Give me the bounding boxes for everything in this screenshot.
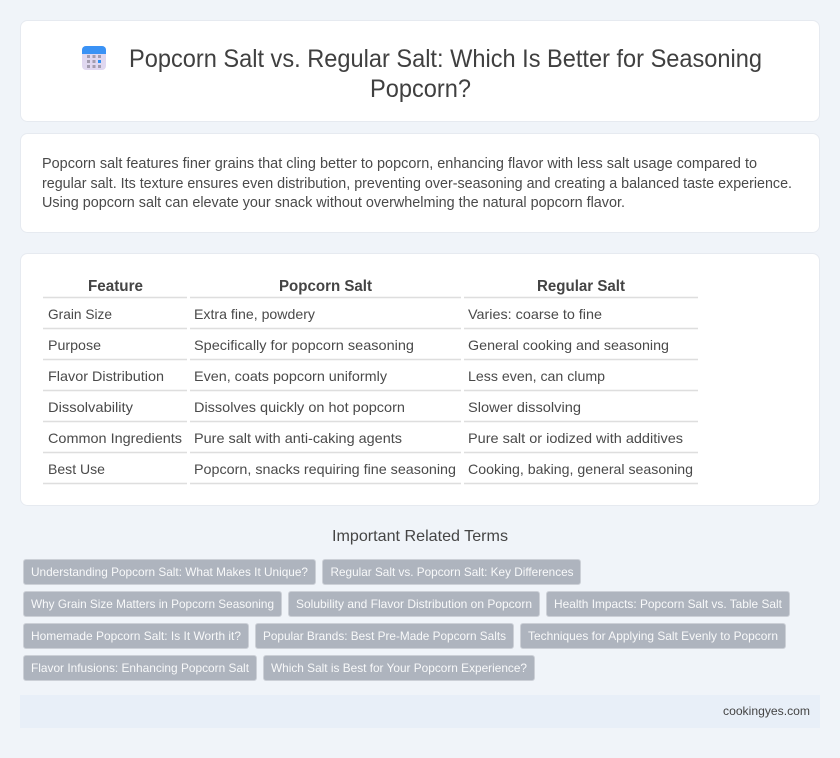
icon: calendar (82, 46, 106, 70)
table row: flavor distribution: Less even, can clump (468, 368, 605, 384)
table row: best use: Cooking, baking, general seasoning (468, 461, 693, 477)
tag: Understanding Popcorn Salt: What Makes It Unique? (31, 565, 308, 579)
tag: Regular Salt vs. Popcorn Salt: Key Differences (330, 565, 574, 579)
table header: Popcorn Salt (279, 278, 373, 295)
tag (264, 656, 534, 680)
tag (24, 624, 248, 648)
table header (88, 278, 626, 295)
footer (20, 695, 820, 728)
text block: introduction (42, 156, 792, 211)
panel: introduction (20, 134, 820, 232)
tag: Techniques for Applying Salt Evenly to Popcorn (528, 629, 778, 643)
table row: flavor distribution: Even, coats popcorn uniformly (194, 368, 387, 384)
table row: dissolvability: Slower dissolving (468, 399, 581, 415)
tag: Which Salt is Best for Your Popcorn Experience? (271, 661, 527, 675)
tag: Solubility and Flavor Distribution on Popcorn (296, 597, 532, 611)
table header: Feature (88, 278, 143, 295)
table row: grain size: Extra fine, powdery (194, 306, 315, 322)
panel: comparison table (20, 254, 820, 506)
tag (24, 656, 256, 680)
table row: dissolvability: Dissolvability (48, 399, 133, 415)
tag: Health Impacts: Popcorn Salt vs. Table Salt (554, 597, 783, 611)
table row: purpose: General cooking and seasoning (468, 337, 669, 353)
tag: Homemade Popcorn Salt: Is It Worth it? (31, 629, 241, 643)
table row: purpose: Specifically for popcorn seasoning (194, 337, 414, 353)
table row: best use (48, 461, 693, 477)
table row: grain size: Varies: coarse to fine (468, 306, 602, 322)
tag (288, 592, 540, 616)
table row: grain size (48, 306, 602, 322)
table row: purpose: Purpose (48, 337, 101, 353)
table row: grain size: Grain Size (48, 306, 112, 322)
table row: best use: Popcorn, snacks requiring fine seasoning (194, 461, 456, 477)
tag (24, 560, 316, 584)
tag group: related terms (24, 560, 790, 680)
text block: introduction: Using popcorn salt can elevate your snack without overwhelming the natural popcorn flavor. (42, 195, 625, 211)
tag (256, 624, 514, 648)
tag: Flavor Infusions: Enhancing Popcorn Salt (31, 661, 250, 675)
table row: best use: Best Use (48, 461, 105, 477)
table row: common ingredients (48, 430, 683, 446)
table row: common ingredients: Common Ingredients (48, 430, 182, 446)
footer: cookingyes.com (723, 704, 810, 718)
tag (24, 592, 282, 616)
table row: purpose (48, 337, 669, 353)
text block: introduction: Popcorn salt features finer grains that cling better to popcorn, enhancing flavor with less salt usage compared to (42, 156, 757, 172)
tag (546, 592, 790, 616)
table row: common ingredients: Pure salt with anti-caking agents (194, 430, 402, 446)
table row: common ingredients: Pure salt or iodized with additives (468, 430, 683, 446)
title (129, 45, 762, 103)
table row: flavor distribution (48, 368, 605, 384)
tag: Popular Brands: Best Pre-Made Popcorn Salts (263, 629, 506, 643)
table header: Regular Salt (537, 278, 626, 295)
table row: flavor distribution: Flavor Distribution (48, 368, 164, 384)
text block: introduction: regular salt. Its texture ensures even distribution, preventing over-seasoning and creating a balanced taste experience. (42, 176, 792, 192)
heading: important related terms: Important Related Terms (332, 528, 508, 545)
title: Popcorn Salt vs. Regular Salt: Which Is Better for Seasoning (129, 45, 762, 73)
tag (322, 560, 580, 584)
table row: dissolvability: Dissolves quickly on hot popcorn (194, 399, 405, 415)
title: Popcorn? (370, 75, 471, 103)
panel: header (20, 20, 820, 122)
table row: dissolvability (48, 399, 581, 415)
tag: Why Grain Size Matters in Popcorn Seasoning (31, 597, 274, 611)
tag (520, 624, 786, 648)
